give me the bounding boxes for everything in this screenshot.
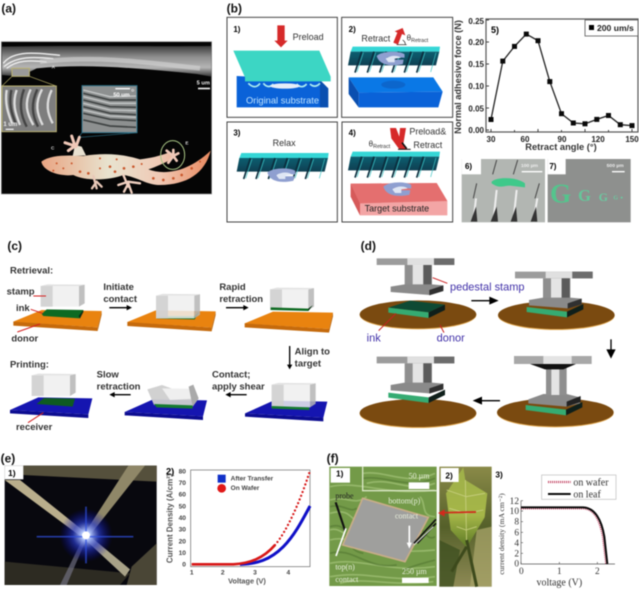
setae micrograph: A	[52, 65, 56, 70]
solar cell micrograph: 50 µm	[409, 472, 430, 481]
retrieval step 2	[127, 294, 216, 331]
step 1: preload: Original substrate	[246, 96, 319, 106]
solar cell micrograph: contact	[335, 575, 359, 584]
current density chart: 80	[179, 469, 186, 476]
solar cell micrograph: top(n)	[335, 562, 355, 571]
heading e: (e)	[1, 452, 15, 466]
align to target arrow	[287, 346, 330, 370]
retrieval step 1: ink	[16, 303, 30, 314]
panel a: gecko adhesion micrographs	[1, 2, 212, 194]
initiate contact arrow: contact	[103, 294, 138, 305]
initiate contact arrow	[103, 282, 138, 310]
step 4: preload and retract: Preload&	[409, 127, 446, 137]
retrieval label: Retrieval:	[10, 265, 53, 276]
solar cell IV chart: 1	[557, 567, 562, 577]
slow retraction arrow	[97, 369, 141, 397]
step 1: preload: Preload	[293, 32, 324, 42]
tick marks	[486, 20, 632, 132]
solar cell IV chart	[495, 469, 616, 588]
step 2: retract: 2)	[349, 25, 356, 34]
y tick labels: 0.15	[468, 60, 485, 69]
connector to foot	[77, 133, 137, 139]
contact and shear arrow	[212, 369, 265, 397]
retrieval step 1	[7, 284, 102, 344]
sub-label 5: 5)	[491, 25, 499, 35]
y axis title: Normal adhesive force (N)	[453, 20, 463, 134]
y tick labels: 0.00	[468, 126, 485, 135]
x tick labels: 150	[625, 135, 639, 144]
solar cell IV chart: 6	[514, 528, 519, 538]
current density chart: 50	[179, 503, 186, 510]
image 6: 6)	[465, 162, 472, 171]
LED photo	[5, 466, 157, 585]
legend: 200 um/s	[597, 23, 634, 33]
solar cell IV chart: 8	[514, 518, 519, 528]
current density chart: After Transfer	[231, 476, 274, 483]
current density chart: 70	[179, 480, 186, 487]
image 6: 100 µm	[521, 163, 539, 169]
solar cell IV chart: 2	[595, 567, 600, 577]
x tick labels: 30	[487, 135, 496, 144]
slow retraction arrow: Slow	[97, 369, 119, 380]
slow retraction arrow: retraction	[97, 381, 141, 392]
arrow left	[473, 397, 500, 405]
solar cell micrograph: 250 µm	[402, 567, 428, 576]
gecko photo background	[1, 42, 212, 194]
step 1	[360, 258, 524, 345]
solar cell micrograph: probe	[335, 492, 354, 501]
heading b: (b)	[227, 2, 242, 16]
heading d: (d)	[361, 239, 376, 253]
current density chart: 4	[286, 570, 290, 577]
step 1: preload: 1)	[233, 25, 241, 34]
align to target arrow: target	[295, 359, 322, 370]
inset: toe pad lamellae: 50 um	[113, 93, 130, 99]
step 4: preload and retract	[342, 122, 453, 222]
current density chart: On Wafer	[231, 485, 260, 492]
solar cell IV chart: 0	[519, 567, 524, 577]
panel b5: adhesive force line chart	[453, 17, 639, 152]
step 3: relax: 3)	[233, 128, 241, 137]
printing step 3	[245, 383, 327, 421]
arrow right	[471, 297, 499, 305]
current density chart: 30	[179, 527, 186, 534]
x tick labels: 60	[521, 135, 530, 144]
step 4: preload and retract: 4)	[349, 128, 356, 137]
solar cell IV chart: on leaf	[573, 489, 601, 500]
data markers	[488, 32, 634, 128]
initiate contact arrow: Initiate	[103, 282, 134, 293]
align to target arrow: Align to	[295, 347, 330, 358]
solar cell IV chart: on wafer	[573, 477, 609, 488]
step 4: preload and retract: θ	[369, 140, 373, 149]
panel b: adhesion control schematics	[227, 2, 453, 222]
step 3: relax	[227, 122, 337, 222]
zoom connector lines	[2, 76, 56, 86]
current density chart: 10	[179, 550, 186, 557]
step 2: retract: Retract	[361, 33, 391, 43]
solar cell micrograph: contact	[395, 511, 419, 520]
step 4: preload and retract: Retract	[413, 140, 443, 150]
x tick labels: 120	[591, 135, 605, 144]
image 7: G	[550, 178, 571, 208]
step 1: preload	[227, 17, 337, 117]
panel c: retrieval and printing steps	[7, 239, 333, 433]
panel e: LED photo and chart	[1, 452, 310, 585]
panel d: pedestal stamp steps	[360, 239, 616, 428]
step 2	[498, 272, 615, 330]
current density chart: 2)	[166, 467, 174, 477]
heading c: (c)	[7, 239, 22, 253]
y tick labels: 0.20	[468, 38, 485, 47]
heading f: (f)	[327, 452, 339, 466]
retrieval step 1: donor	[11, 333, 39, 344]
x axis title: Retract angle (°)	[525, 142, 597, 152]
step 3: relax: Relax	[273, 138, 296, 148]
y tick labels: 0.10	[468, 82, 485, 91]
image 7: G	[599, 190, 608, 204]
gecko: E	[185, 141, 188, 146]
step 4	[360, 357, 476, 428]
inset: toe pad lamellae: D	[131, 87, 134, 92]
current density chart: 1	[190, 570, 194, 577]
solar cell micrograph: bottom(p)	[388, 496, 421, 505]
gecko	[41, 136, 211, 193]
image 7: G	[613, 196, 618, 202]
current density chart: 3	[253, 570, 257, 577]
printing label: Printing:	[10, 359, 49, 370]
data line	[491, 34, 632, 126]
rapid retraction arrow: retraction	[219, 294, 263, 305]
current density chart: Voltage (V)	[228, 576, 266, 585]
y tick labels: 0.25	[468, 17, 485, 26]
setae micrograph	[2, 46, 211, 89]
heading a: (a)	[1, 2, 16, 16]
current density chart	[166, 467, 310, 585]
current density chart: 40	[179, 515, 186, 522]
x tick labels: 90	[558, 135, 567, 144]
setae micrograph: 5 um	[197, 81, 210, 87]
solar cell IV chart: 10	[510, 507, 519, 517]
rapid retraction arrow	[219, 282, 263, 310]
inset: toe pad lamellae	[82, 86, 137, 133]
solar cell micrograph: 1)	[336, 469, 344, 479]
solar cell IV chart: 2	[514, 550, 519, 560]
step 4: preload and retract: Target substrate	[365, 203, 429, 213]
solar cell IV chart: voltage (V)	[536, 577, 582, 588]
inset: spatulae: 1 um	[3, 122, 17, 128]
gecko: C	[51, 145, 55, 150]
solar cell IV chart: 4	[514, 539, 519, 549]
y tick labels	[468, 17, 485, 135]
step 2: retract: Retract	[411, 38, 429, 44]
legend	[585, 20, 638, 36]
image 7: G	[578, 186, 591, 205]
arrow down	[606, 339, 616, 359]
solar cell micrograph	[329, 467, 437, 586]
printing step 1: receiver	[16, 422, 53, 433]
current density chart: 20	[179, 538, 186, 545]
current density chart: 60	[179, 492, 186, 499]
panels b6 and b7: transferred G images	[462, 159, 631, 222]
x tick labels	[487, 135, 639, 144]
step 4: preload and retract: Retract	[373, 144, 391, 150]
panel f: flexible solar cell	[327, 452, 616, 588]
image 7: 7)	[549, 162, 557, 171]
retrieval step 3	[245, 288, 333, 333]
retrieval step 1: stamp	[7, 286, 35, 297]
LED photo: 1)	[8, 468, 16, 478]
solar cell IV chart: 12	[510, 497, 519, 507]
step 2: retract: θ	[407, 34, 411, 43]
rapid retraction arrow: Rapid	[219, 282, 246, 293]
step 2: retract	[342, 17, 453, 117]
image 7: 500 µm	[607, 163, 624, 169]
leaf photo: 2)	[445, 470, 453, 480]
printing step 1	[10, 374, 92, 433]
current density chart: 2	[221, 570, 225, 577]
contact and shear arrow: apply shear	[212, 381, 265, 392]
image 6	[462, 159, 545, 222]
solar cell IV chart: 0	[514, 560, 519, 570]
contact and shear arrow: Contact;	[212, 369, 250, 380]
plot frame	[486, 19, 638, 132]
solar cell IV chart: current density (mA cm⁻²)	[497, 493, 506, 575]
step 3: stretched stamp	[497, 356, 614, 427]
step 1: pedestal stamp	[450, 281, 524, 293]
current density chart: 0	[182, 562, 186, 569]
image 7	[548, 159, 631, 222]
current density chart: Current Density (A/cm²)	[166, 473, 175, 563]
solar cell IV chart: 3)	[495, 469, 503, 479]
step 1: ink	[367, 333, 381, 345]
leaf photo	[438, 467, 492, 587]
inset: spatulae	[2, 86, 56, 132]
step 1: donor	[437, 333, 465, 345]
y tick labels: 0.05	[468, 104, 485, 114]
printing step 2: sheared stamp	[125, 385, 207, 420]
